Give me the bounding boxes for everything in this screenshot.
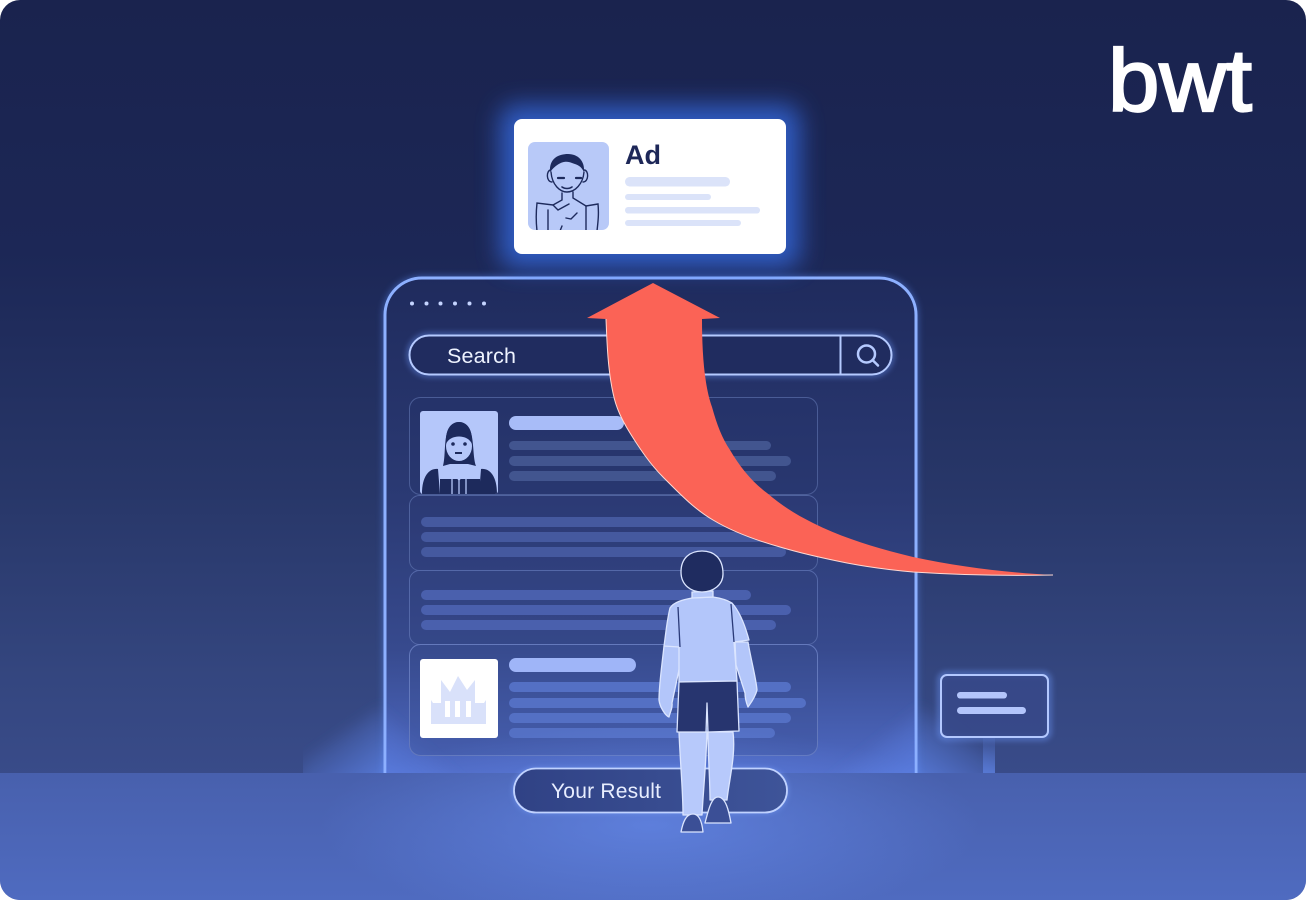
side light glows [290,705,1010,790]
arms [659,642,757,717]
search bar [409,335,892,375]
your result button [513,768,788,813]
logo: bwt: bwt [1108,31,1252,130]
ad portrait [528,142,609,231]
head [681,551,723,592]
legs [679,732,734,815]
floor [0,743,1306,900]
ad card: Ad [625,140,661,170]
person walking [659,551,757,832]
your result button: Your Result [551,780,661,803]
collar [692,591,713,598]
icon: magnifier [858,346,878,366]
shoes [681,797,731,832]
search bar: Search [447,344,516,368]
torso [664,597,749,682]
shorts [677,681,739,732]
result row 1 [410,398,818,495]
arrow: red curved up arrow [587,283,1053,575]
ad card [500,105,800,268]
result row 3 [410,570,818,644]
result row 4 [410,644,818,756]
thumbnail: crown icon [420,659,498,738]
window dots [410,302,486,306]
small side card [940,674,1049,738]
panel: browser window [379,272,922,773]
thumbnail: woman portrait [420,411,498,495]
result row 2 [410,496,818,570]
